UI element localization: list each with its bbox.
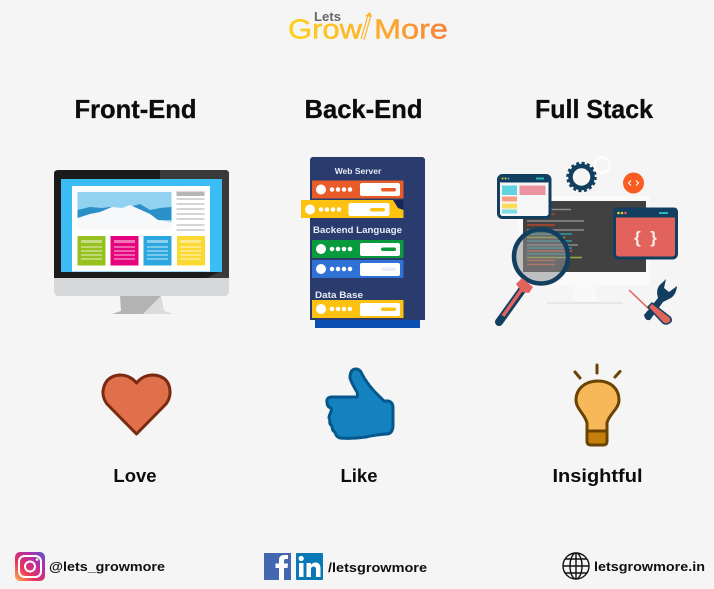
footer: facebook and linkedin: /letsgrowmore: [328, 560, 427, 575]
label: Web Server: Web Server: [335, 166, 382, 176]
icon: facebook: [264, 553, 291, 580]
logo: Grow: [288, 14, 363, 44]
illustration: server rack: [301, 157, 425, 328]
heading: Full Stack: Full Stack: [535, 94, 654, 124]
icon: light bulb: [575, 365, 620, 445]
label: Backend Language: Backend Language: [313, 225, 402, 235]
gear: [568, 163, 596, 191]
red code window: [614, 209, 676, 258]
wrench and screwdriver: [629, 279, 677, 324]
logo: [288, 10, 448, 44]
heading: Back-End: Back-End: [304, 94, 422, 124]
footer: instagram: [15, 552, 165, 581]
icon: globe: [563, 553, 589, 579]
icon: instagram: [15, 552, 45, 581]
code badge: [623, 172, 644, 194]
illustration: desktop monitor: [54, 170, 229, 314]
label: Data Base: Data Base: [315, 290, 363, 300]
label: Insightful: Insightful: [552, 465, 642, 486]
server: orange: [312, 180, 404, 198]
icon: linkedin: [296, 553, 323, 580]
magnifier: [499, 230, 568, 322]
heading: Front-End: Front-End: [74, 94, 196, 124]
label: Love: Love: [113, 465, 157, 486]
illustration: full stack tools: [498, 158, 677, 324]
footer: facebook and linkedin: [264, 553, 427, 580]
logo: More: [374, 14, 448, 44]
code screen: [523, 201, 646, 272]
footer: website: [563, 553, 705, 579]
pale monitor: [518, 196, 650, 304]
small browser window: [498, 176, 550, 218]
footer: instagram: @lets_growmore: [49, 559, 165, 574]
red code window: { }: [634, 228, 657, 247]
logo: Lets: [314, 10, 341, 24]
server: yellow offset: [301, 200, 404, 218]
icon: heart: [103, 375, 170, 434]
server: blue: [312, 260, 404, 278]
content cards: [78, 236, 205, 266]
label: Like: Like: [340, 465, 378, 486]
white ring: [594, 158, 610, 172]
icon: thumbs up: [327, 369, 393, 438]
server: yellow: [312, 300, 404, 318]
sidebar lines: [176, 192, 204, 231]
footer: website: letsgrowmore.in: [594, 559, 705, 574]
server: green: [312, 240, 404, 258]
